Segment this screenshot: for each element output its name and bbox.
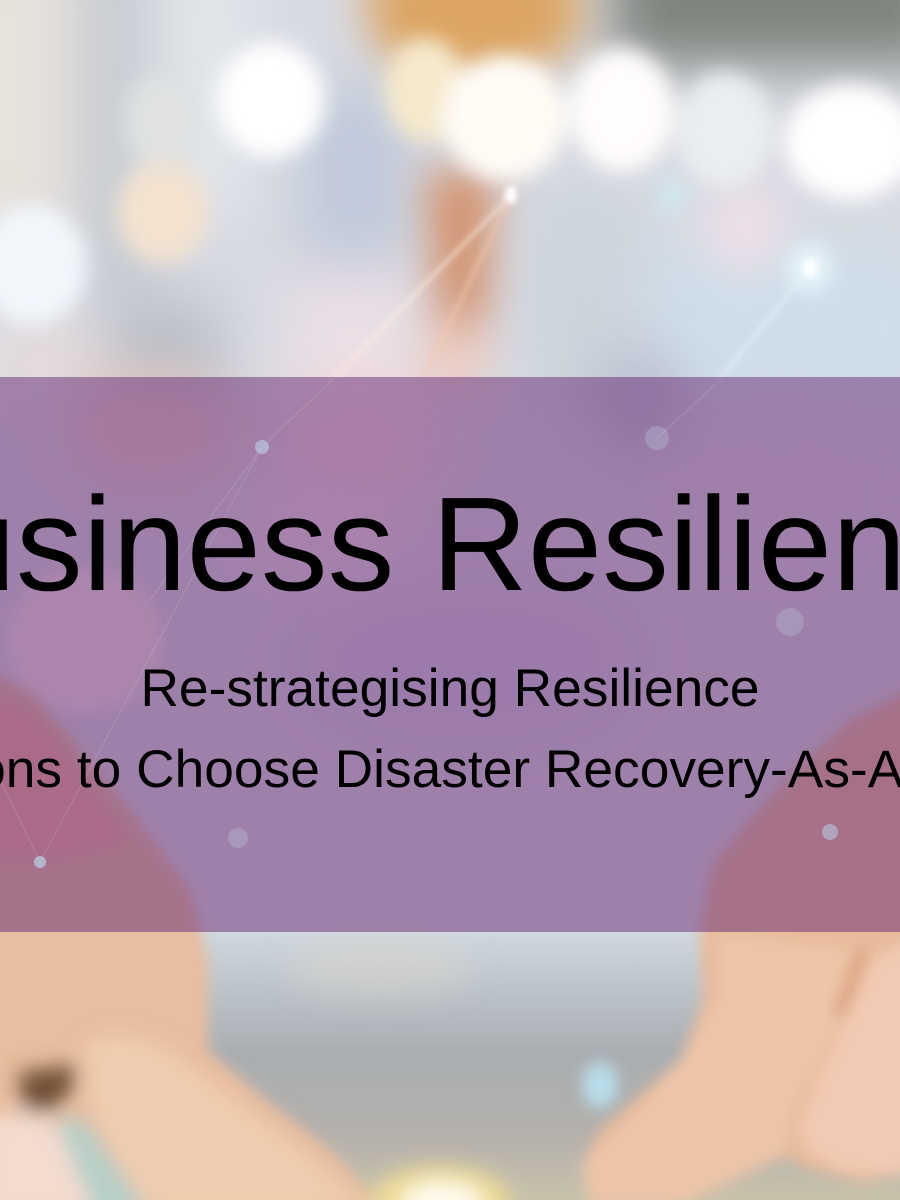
left hand: [0, 568, 390, 1200]
left thumb and shadow: [0, 1036, 370, 1200]
right hand crease: [838, 950, 862, 1015]
right hand: [582, 685, 900, 1200]
blue bokeh dot: [582, 1062, 618, 1108]
ray nodes: [505, 186, 817, 278]
purple title band: [0, 377, 900, 932]
bright yellow glow at bottom: [372, 1166, 508, 1200]
subtitle: Re-strategising Resilience: [140, 659, 760, 718]
lower bokeh: [290, 933, 470, 997]
light rays: [332, 195, 810, 385]
band soft lights: [60, 350, 900, 750]
